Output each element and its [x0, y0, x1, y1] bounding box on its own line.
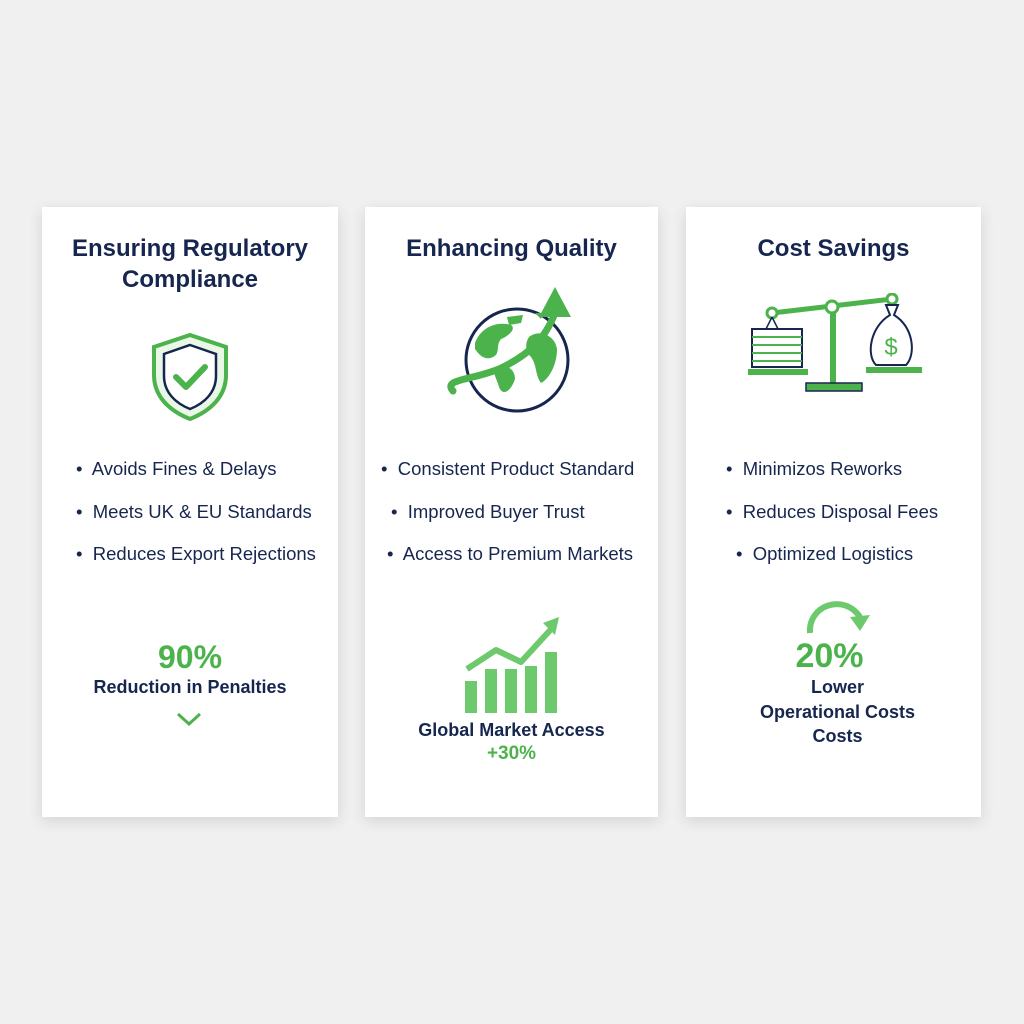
icon: balance scale: $	[884, 334, 898, 361]
panel: quality: • Improved Buyer Trust	[391, 501, 585, 522]
panel: compliance	[42, 207, 338, 817]
bullets: compliance	[76, 458, 316, 564]
bullets: cost	[726, 458, 938, 564]
heading: compliance: Compliance	[122, 266, 258, 293]
icon: balance scale	[748, 293, 922, 392]
panel: compliance: • Reduces Export Rejections	[76, 543, 316, 564]
stat label: global market access: Global Market Access	[418, 720, 605, 740]
stat label: lower operational costs: Costs	[812, 726, 862, 746]
stat label: lower operational costs: Lower	[811, 677, 864, 697]
heading: quality: Enhancing Quality	[406, 235, 617, 262]
stat: +30%: +30%	[487, 743, 536, 764]
chart: bar growth	[465, 617, 559, 713]
panel: compliance: • Avoids Fines & Delays	[76, 458, 276, 479]
heading: compliance	[72, 235, 308, 293]
icon: globe with arrow	[447, 287, 571, 412]
panel: cost savings: • Reduces Disposal Fees	[726, 501, 938, 522]
bullets: quality	[381, 458, 634, 564]
stat label: Reduction in Penalties	[93, 677, 287, 697]
panel: quality: • Consistent Product Standard	[381, 458, 634, 479]
heading: cost savings: Cost Savings	[757, 235, 910, 262]
heading: compliance: Ensuring Regulatory	[72, 235, 308, 262]
stat label: lower operational costs	[760, 677, 915, 746]
panel: quality: • Access to Premium Markets	[387, 543, 633, 564]
stat: 20%: 20%	[795, 637, 864, 675]
panel: cost savings: • Optimized Logistics	[736, 543, 913, 564]
stat: 90%: 90%	[158, 639, 222, 675]
icon: chevron	[177, 713, 201, 726]
stat label: lower operational costs: Operational Costs	[760, 702, 915, 722]
panel: quality	[365, 207, 658, 817]
panel: cost savings	[686, 207, 981, 817]
icon: curved arrow	[806, 601, 870, 634]
icon: shield	[152, 332, 228, 422]
panel: compliance: • Meets UK & EU Standards	[76, 501, 312, 522]
panel: cost savings: • Minimizos Reworks	[726, 458, 902, 479]
